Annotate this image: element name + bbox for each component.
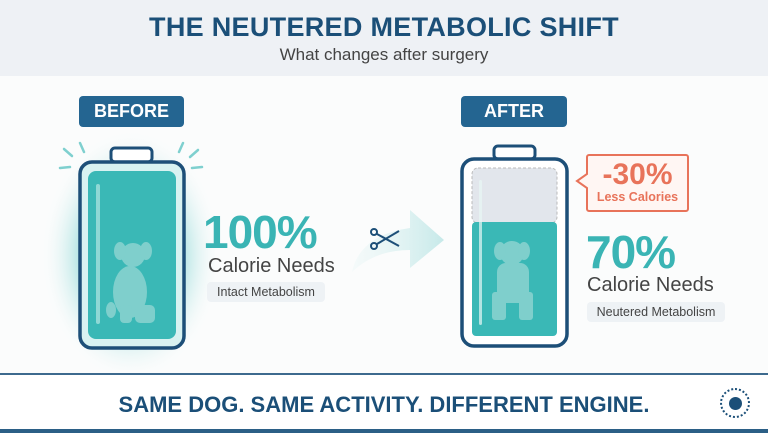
- label: Calorie Needs: [587, 274, 714, 296]
- title: THE NEUTERED METABOLIC SHIFT: [149, 12, 619, 42]
- stat: before: [203, 206, 335, 302]
- badge: before: BEFORE: [94, 101, 169, 121]
- logo: [720, 388, 750, 418]
- pill: Neutered Metabolism: [597, 305, 715, 319]
- badge: after: AFTER: [484, 101, 544, 121]
- callout: -30%: Less Calories: [597, 190, 678, 204]
- 70%: 70%: [586, 226, 675, 278]
- stat: after: [586, 226, 725, 322]
- footer: [0, 373, 768, 432]
- battery: before: [54, 142, 208, 362]
- header band: [0, 0, 768, 76]
- subtitle: What changes after surgery: [280, 45, 488, 64]
- callout: -30%: -30%: [602, 158, 673, 191]
- badge: before: [79, 96, 184, 127]
- arrow with scissors: [358, 210, 444, 268]
- tagline: SAME DOG. SAME ACTIVITY. DIFFERENT ENGINE.: [119, 392, 649, 417]
- label: Calorie Needs: [208, 255, 335, 277]
- battery: after: [460, 144, 569, 348]
- pill: Intact Metabolism: [217, 285, 315, 299]
- badge: after: [461, 96, 567, 127]
- 100%: 100%: [203, 206, 317, 258]
- pill: [587, 302, 725, 322]
- pill: [207, 282, 325, 302]
- callout: -30%: [575, 154, 689, 212]
